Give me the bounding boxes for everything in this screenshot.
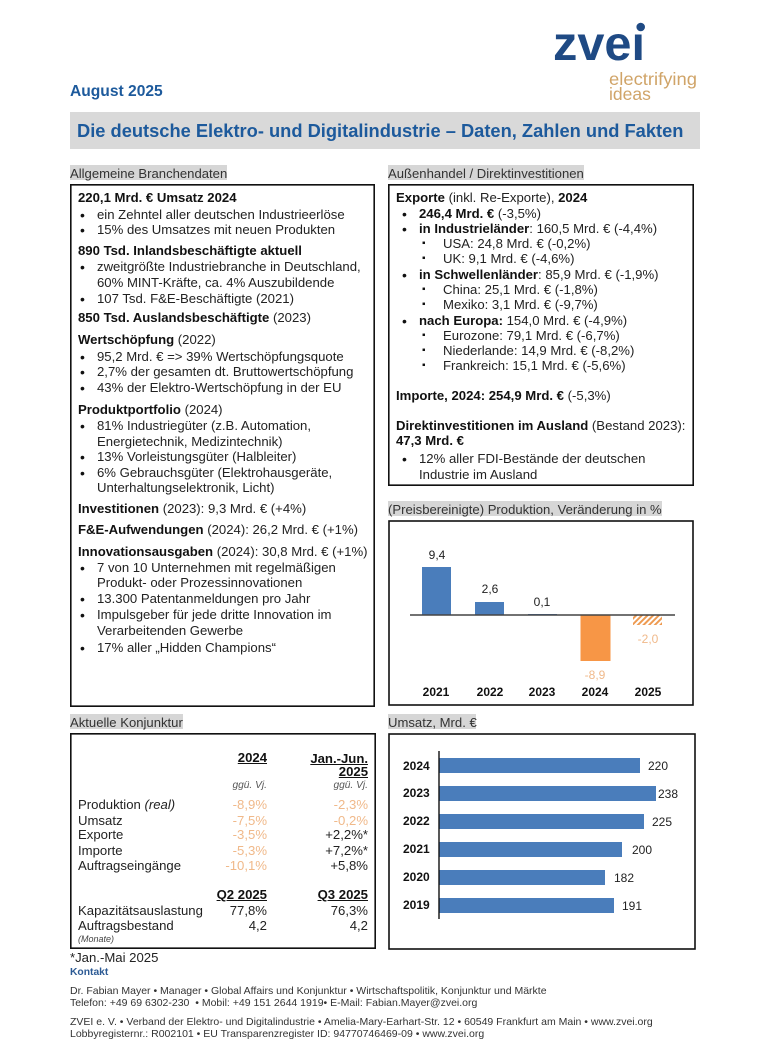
panel: Allgemeine Branchendaten: 95,2 Mrd. € => 39% Wertschöpfungsquote bbox=[97, 349, 344, 364]
logo: zvei electrifying ideas: ideas bbox=[609, 84, 651, 104]
panel: Außenhandel / Direktinvestitionen: Industrie im Ausland bbox=[419, 467, 537, 482]
panel: Allgemeine Branchendaten: 13.300 Patentanmeldungen pro Jahr bbox=[97, 591, 310, 606]
panel: Allgemeine Branchendaten: 890 Tsd. Inlandsbeschäftigte aktuell bbox=[78, 243, 302, 258]
logo: zvei electrifying ideas bbox=[553, 18, 697, 104]
panel: Allgemeine Branchendaten: 17% aller „Hidden Champions“ bbox=[97, 640, 276, 655]
chart: Umsatz, Mrd. €: 2023 bbox=[403, 786, 430, 800]
chart: Produktion, Veränderung in %: -2,0 bbox=[638, 632, 659, 646]
chart: Umsatz, Mrd. €: 2022 bbox=[403, 814, 430, 828]
panel: Allgemeine Branchendaten: 13% Vorleistungsgüter (Halbleiter) bbox=[97, 449, 296, 464]
panel: Allgemeine Branchendaten: 220,1 Mrd. € Umsatz 2024 bbox=[78, 190, 237, 205]
panel: Außenhandel / Direktinvestitionen: China: 25,1 Mrd. € (-1,8%) bbox=[443, 282, 598, 297]
contact details: Telefon: +49 69 6302-230 • Mobil: +49 151 2644 1919• E-Mail: Fabian.Mayer@zvei.org bbox=[70, 997, 477, 1009]
panel: Aktuelle Konjunktur table: Jan.-Jun. bbox=[310, 751, 368, 766]
panel: Allgemeine Branchendaten: 107 Tsd. F&E-Beschäftigte (2021) bbox=[97, 291, 294, 306]
chart: Umsatz, Mrd. €: 2020 bbox=[403, 870, 430, 884]
heading: Allgemeine Branchendaten: Allgemeine Branchendaten bbox=[70, 166, 227, 181]
contact details: Lobbyregisternr.: R002101 • EU Transparenzregister ID: 94770746469-09 • www.zvei.org bbox=[70, 1028, 484, 1040]
chart: Produktion, Veränderung in %: 2021 bbox=[423, 685, 450, 699]
panel: Aktuelle Konjunktur table: Q2 2025 bbox=[217, 887, 267, 902]
panel: Außenhandel / Direktinvestitionen: 246,4 Mrd. € (-3,5%) bbox=[419, 206, 541, 221]
title banner: Die deutsche Elektro- und Digitalindustrie – Daten, Zahlen und Fakten bbox=[77, 120, 683, 141]
panel: Aktuelle Konjunktur table: +7,2%* bbox=[325, 843, 368, 858]
panel: Allgemeine Branchendaten: Unterhaltungselektronik, Licht) bbox=[97, 480, 274, 495]
chart: Produktion, Veränderung in %: 2023 bbox=[529, 685, 556, 699]
panel: Allgemeine Branchendaten: Impulsgeber für jede dritte Innovation im bbox=[97, 607, 331, 622]
panel: Außenhandel / Direktinvestitionen: 47,3 Mrd. € bbox=[396, 433, 464, 448]
panel: Außenhandel / Direktinvestitionen: UK: 9,1 Mrd. € (-4,6%) bbox=[443, 251, 574, 266]
panel: Allgemeine Branchendaten: 2,7% der gesamten dt. Bruttowertschöpfung bbox=[97, 364, 353, 379]
panel: Allgemeine Branchendaten: 60% MINT-Kräfte, ca. 4% Auszubildende bbox=[97, 275, 334, 290]
panel: Allgemeine Branchendaten: Wertschöpfung (2022) bbox=[78, 332, 216, 347]
panel: Aktuelle Konjunktur table: -8,9% bbox=[233, 797, 267, 812]
panel: Außenhandel / Direktinvestitionen: in Industrieländer: 160,5 Mrd. € (-4,4%) bbox=[419, 221, 657, 236]
panel: Außenhandel / Direktinvestitionen bbox=[388, 184, 694, 486]
panel: Allgemeine Branchendaten: Verarbeitenden Gewerbe bbox=[97, 623, 243, 638]
chart: Umsatz, Mrd. €: 238 bbox=[658, 787, 678, 801]
heading: Umsatz: Umsatz, Mrd. € bbox=[388, 715, 477, 730]
chart: Umsatz, Mrd. €: 2019 bbox=[403, 898, 430, 912]
panel: Aktuelle Konjunktur table: -7,5% bbox=[233, 813, 267, 828]
contact details: Dr. Fabian Mayer • Manager • Global Affairs und Konjunktur • Wirtschaftspolitik, Konjunktur und Märkte bbox=[70, 985, 547, 997]
chart: Produktion, Veränderung in %: -8,9 bbox=[585, 668, 606, 682]
panel: Aktuelle Konjunktur table: -10,1% bbox=[225, 858, 267, 873]
logo: zvei electrifying ideas: electrifying bbox=[609, 69, 697, 89]
panel: Aktuelle Konjunktur table: Auftragsbestand bbox=[78, 918, 174, 933]
panel: Aktuelle Konjunktur table: 76,3% bbox=[331, 903, 368, 918]
panel: Aktuelle Konjunktur table: ggü. Vj. bbox=[333, 780, 368, 791]
panel: Allgemeine Branchendaten: 7 von 10 Unternehmen mit regelmäßigen bbox=[97, 560, 336, 575]
panel: Aktuelle Konjunktur table: 4,2 bbox=[249, 918, 267, 933]
panel: Aktuelle Konjunktur table: (Monate) bbox=[78, 934, 114, 944]
chart: Umsatz, Mrd. €: 225 bbox=[652, 815, 672, 829]
heading: Außenhandel / Direktinvestitionen: Außenhandel / Direktinvestitionen bbox=[388, 166, 584, 181]
contact details: ZVEI e. V. • Verband der Elektro- und Digitalindustrie • Amelia-Mary-Earhart-Str. 12 • 60549 Frankfurt am Main • www.zvei.org bbox=[70, 1016, 653, 1028]
panel: Aktuelle Konjunktur table: -5,3% bbox=[233, 843, 267, 858]
panel: Aktuelle Konjunktur table: -0,2% bbox=[334, 813, 368, 828]
panel: Allgemeine Branchendaten: 15% des Umsatzes mit neuen Produkten bbox=[97, 222, 335, 237]
panel: Außenhandel / Direktinvestitionen: USA: 24,8 Mrd. € (-0,2%) bbox=[443, 236, 591, 251]
panel: Außenhandel / Direktinvestitionen: Direktinvestitionen im Ausland (Bestand 2023): bbox=[396, 418, 685, 433]
chart: Umsatz, Mrd. €: 191 bbox=[622, 899, 642, 913]
date: August 2025 bbox=[70, 83, 163, 100]
panel: Allgemeine Branchendaten: Innovationsausgaben (2024): 30,8 Mrd. € (+1%) bbox=[78, 544, 368, 559]
panel: Außenhandel / Direktinvestitionen: Importe, 2024: 254,9 Mrd. € (-5,3%) bbox=[396, 388, 611, 403]
panel: Aktuelle Konjunktur table: +5,8% bbox=[330, 858, 368, 873]
panel: Allgemeine Branchendaten: 43% der Elektro-Wertschöpfung in der EU bbox=[97, 380, 341, 395]
panel: Außenhandel / Direktinvestitionen: 12% aller FDI-Bestände der deutschen bbox=[419, 451, 645, 466]
contact details bbox=[70, 985, 653, 1040]
chart: Produktion, Veränderung in %: 2022 bbox=[477, 685, 504, 699]
panel: Aktuelle Konjunktur table: Kapazitätsauslastung bbox=[78, 903, 203, 918]
panel: Außenhandel / Direktinvestitionen: Mexiko: 3,1 Mrd. € (-9,7%) bbox=[443, 297, 598, 312]
panel: Allgemeine Branchendaten: 6% Gebrauchsgüter (Elektrohausgeräte, bbox=[97, 465, 332, 480]
panel: Außenhandel / Direktinvestitionen: Frankreich: 15,1 Mrd. € (-5,6%) bbox=[443, 358, 626, 373]
panel: Allgemeine Branchendaten: 850 Tsd. Auslandsbeschäftigte (2023) bbox=[78, 310, 311, 325]
heading: Produktion: (Preisbereinigte) Produktion, Veränderung in % bbox=[388, 502, 662, 517]
panel: Aktuelle Konjunktur table: 2025 bbox=[339, 764, 368, 779]
panel: Aktuelle Konjunktur table: Q3 2025 bbox=[318, 887, 368, 902]
panel: Aktuelle Konjunktur table: Auftragseingänge bbox=[78, 858, 181, 873]
chart: Umsatz, Mrd. €: 2024 bbox=[403, 759, 430, 773]
panel: Aktuelle Konjunktur table: ggü. Vj. bbox=[232, 780, 267, 791]
title banner bbox=[70, 112, 700, 149]
panel: Aktuelle Konjunktur table: 2024 bbox=[238, 750, 267, 765]
chart: Produktion, Veränderung in %: 0,1 bbox=[534, 595, 551, 609]
chart: Umsatz, Mrd. €: 220 bbox=[648, 759, 668, 773]
panel: Außenhandel / Direktinvestitionen: in Schwellenländer: 85,9 Mrd. € (-1,9%) bbox=[419, 267, 659, 282]
panel: Aktuelle Konjunktur table: Importe bbox=[78, 843, 123, 858]
panel: Außenhandel / Direktinvestitionen: nach Europa: 154,0 Mrd. € (-4,9%) bbox=[419, 313, 627, 328]
logo: zvei electrifying ideas: zvei bbox=[553, 18, 645, 71]
panel: Allgemeine Branchendaten: Produkt- oder Prozessinnovationen bbox=[97, 575, 302, 590]
panel: Allgemeine Branchendaten bbox=[70, 184, 375, 707]
chart: Produktion, Veränderung in %: 2025 bbox=[635, 685, 662, 699]
panel: Aktuelle Konjunktur table: +2,2%* bbox=[325, 827, 368, 842]
footnote: *Jan.-Mai 2025 bbox=[70, 950, 158, 965]
panel: Allgemeine Branchendaten: Investitionen (2023): 9,3 Mrd. € (+4%) bbox=[78, 501, 306, 516]
chart: Produktion, Veränderung in % bbox=[388, 520, 694, 706]
panel: Aktuelle Konjunktur table: -3,5% bbox=[233, 827, 267, 842]
panel: Allgemeine Branchendaten: zweitgrößte Industriebranche in Deutschland, bbox=[97, 259, 361, 274]
contact heading: Kontakt bbox=[70, 967, 108, 978]
chart: Umsatz, Mrd. €: 2021 bbox=[403, 842, 430, 856]
chart: Produktion, Veränderung in %: 2024 bbox=[582, 685, 609, 699]
chart: Umsatz, Mrd. € bbox=[388, 733, 696, 950]
panel: Außenhandel / Direktinvestitionen: Niederlande: 14,9 Mrd. € (-8,2%) bbox=[443, 343, 634, 358]
panel: Außenhandel / Direktinvestitionen: Exporte (inkl. Re-Exporte), 2024 bbox=[396, 190, 587, 205]
panel: Aktuelle Konjunktur table: Exporte bbox=[78, 827, 123, 842]
panel: Aktuelle Konjunktur table: Umsatz bbox=[78, 813, 123, 828]
panel: Aktuelle Konjunktur table: Produktion (real) bbox=[78, 797, 175, 812]
heading: Aktuelle Konjunktur: Aktuelle Konjunktur bbox=[70, 715, 183, 730]
panel: Aktuelle Konjunktur table: 77,8% bbox=[230, 903, 267, 918]
panel: Allgemeine Branchendaten: Produktportfolio (2024) bbox=[78, 402, 223, 417]
panel: Allgemeine Branchendaten: Energietechnik, Medizintechnik) bbox=[97, 434, 283, 449]
panel: Aktuelle Konjunktur table: -2,3% bbox=[334, 797, 368, 812]
panel: Außenhandel / Direktinvestitionen: Eurozone: 79,1 Mrd. € (-6,7%) bbox=[443, 328, 620, 343]
chart: Umsatz, Mrd. €: 200 bbox=[632, 843, 652, 857]
panel: Aktuelle Konjunktur table bbox=[70, 733, 376, 949]
panel: Allgemeine Branchendaten: F&E-Aufwendungen (2024): 26,2 Mrd. € (+1%) bbox=[78, 522, 358, 537]
chart: Produktion, Veränderung in %: 2,6 bbox=[482, 582, 499, 596]
panel: Aktuelle Konjunktur table: 4,2 bbox=[350, 918, 368, 933]
panel: Allgemeine Branchendaten: ein Zehntel aller deutschen Industrieerlöse bbox=[97, 207, 345, 222]
panel: Allgemeine Branchendaten: 81% Industriegüter (z.B. Automation, bbox=[97, 418, 311, 433]
chart: Produktion, Veränderung in %: 9,4 bbox=[429, 548, 446, 562]
chart: Umsatz, Mrd. €: 182 bbox=[614, 871, 634, 885]
